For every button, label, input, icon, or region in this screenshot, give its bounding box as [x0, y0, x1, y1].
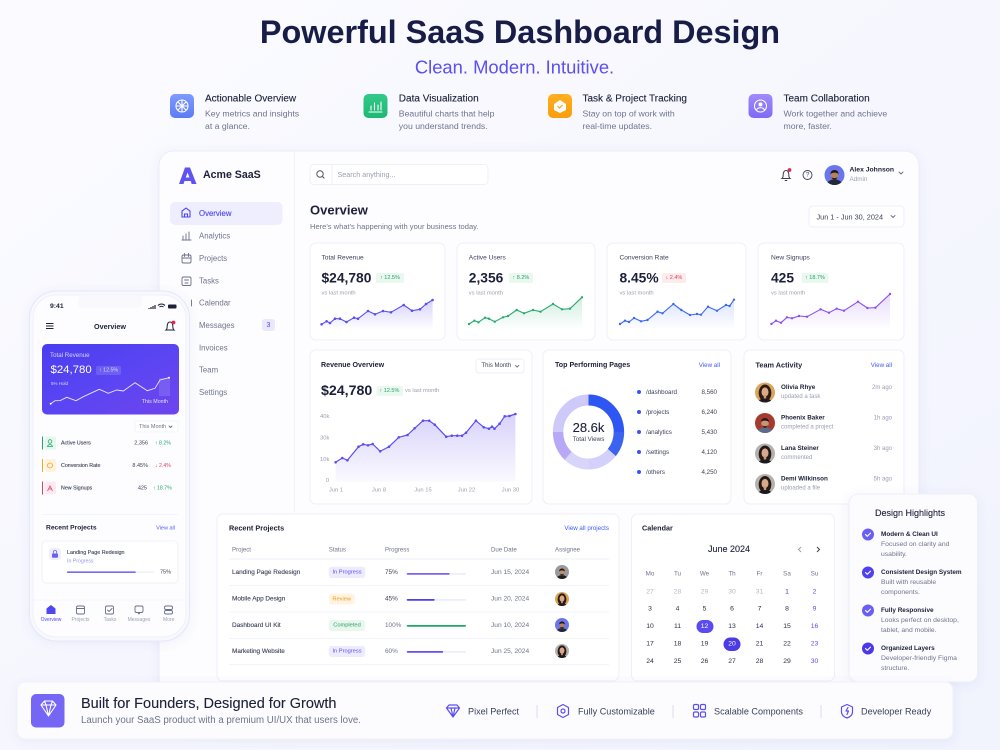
logo: Acme SaaS [203, 169, 261, 181]
panel: design highlights [849, 494, 978, 682]
date grid: 15 [783, 623, 791, 630]
highlight: fully responsive [862, 604, 959, 634]
panel: team activity: View all [871, 362, 892, 369]
badge: fully customizable: Fully Customizable [578, 706, 655, 716]
phone recent projects: In Progress [67, 558, 94, 564]
table header: Progress [385, 546, 409, 554]
date grid: 29 [701, 588, 708, 596]
donut chart [558, 400, 619, 464]
member: olivia rhye: updated a task [781, 394, 821, 400]
date grid: 8 [785, 606, 789, 612]
member: lana steiner: Lana Steiner [781, 445, 819, 452]
kpi: conversion rate: ↓ 2.4% [666, 275, 682, 281]
row: mobile app design: Jun 20, 2024 [491, 595, 529, 602]
date grid: 28 [674, 588, 681, 596]
row: landing page redesign: Landing Page Redesign [232, 569, 301, 576]
weekday labels: Mo [646, 570, 655, 578]
date grid: 25 [674, 658, 681, 665]
feature: data visualization: Data Visualization [399, 94, 479, 104]
panel: design highlights: Design Highlights [875, 508, 946, 518]
search box [310, 164, 488, 184]
date grid: 5 [703, 606, 707, 612]
kpi: conversion rate: Conversion Rate [620, 254, 669, 262]
row: dashboard ui kit: Dashboard UI Kit [232, 622, 281, 629]
nav: overview active [170, 202, 282, 225]
bottom banner [17, 682, 953, 739]
member: olivia rhye: Olivia Rhye [781, 384, 816, 391]
feature row [170, 94, 887, 131]
weekday labels: Th [728, 570, 736, 578]
phone row: new signups: ↑ 18.7% [153, 485, 172, 491]
line chart: revenue: Jun 8 [372, 488, 386, 494]
date grid: 14 [756, 623, 763, 630]
kpi: conversion rate [607, 243, 746, 340]
row: dashboard ui kit: Jun 10, 2024 [491, 622, 529, 629]
phone header [46, 321, 175, 331]
date grid: 6 [730, 606, 734, 612]
nav: team: Team [199, 366, 218, 374]
highlight: modern and clean: Focused on clarity and [881, 541, 950, 548]
nav: overview active: Overview [199, 209, 232, 218]
overview heading: Overview [310, 202, 369, 218]
highlight: modern and clean [862, 528, 950, 558]
table header: Status [329, 546, 346, 554]
phone row: conversion rate: 8.45% [132, 463, 148, 469]
kpi: conversion rate: vs last month [620, 290, 654, 296]
member: lana steiner: commented [781, 455, 812, 461]
nav item: more: More [163, 617, 175, 623]
legend: 4,250 [702, 469, 718, 476]
panel: recent projects table: View all projects [564, 525, 609, 532]
member: lana steiner: 3h ago [874, 446, 893, 452]
weekday labels: Sa [783, 570, 791, 578]
feature: task and project tracking [548, 94, 687, 131]
date grid: 17 [646, 640, 654, 648]
weekday labels [646, 570, 819, 578]
highlight: consistent design system: Built with reusable [881, 579, 936, 586]
phone dropdown [135, 421, 178, 432]
date grid: 1 [785, 588, 789, 596]
feature: task and project tracking: real-time updates. [582, 121, 652, 131]
phone project icon [49, 548, 61, 560]
badge: developer ready: Developer Ready [861, 706, 932, 716]
date grid: 29 [783, 658, 791, 665]
panel: team activity [744, 350, 904, 504]
row: marketing website: Jun 25, 2024 [491, 648, 529, 655]
line chart: revenue: Jun 15 [414, 488, 432, 494]
kpi: active users: vs last month [469, 290, 503, 296]
date grid: 21 [756, 640, 763, 648]
title: Powerful SaaS Dashboard Design [260, 14, 780, 50]
date grid: 2 [813, 588, 817, 596]
legend: /settings [646, 449, 669, 456]
kpi: new signups: vs last month [771, 290, 805, 296]
phone row: conversion rate: Conversion Rate [61, 463, 101, 469]
phone recent projects [42, 524, 178, 583]
feature: data visualization [364, 94, 495, 131]
nav item: messages: Messages [128, 617, 151, 623]
legend: /analytics [646, 429, 672, 436]
icon: help: ? [806, 172, 810, 179]
user avatar [824, 165, 844, 190]
phone revenue card: $24,780 [50, 364, 92, 376]
date grid: 10 [646, 623, 654, 630]
nav: messages [199, 319, 275, 331]
date grid: 27 [728, 658, 736, 665]
date grid: 12 [701, 623, 708, 630]
panel: calendar: Calendar [642, 524, 673, 532]
member: olivia rhye: 2m ago [872, 385, 893, 391]
row: landing page redesign: Jun 15, 2024 [491, 569, 529, 576]
search box: Search anything... [338, 170, 395, 179]
date grid: 30 [728, 588, 736, 596]
logo [179, 168, 261, 184]
phone recent projects: 75% [160, 569, 171, 575]
date grid: 26 [701, 658, 708, 665]
table header: Assignee [555, 546, 581, 554]
weekday labels: Fr [757, 570, 762, 578]
phone mockup [30, 291, 190, 641]
panel: revenue overview: $24,780 [321, 383, 372, 399]
date grid: 28 [756, 658, 763, 665]
member: phoenix baker: Phoenix Baker [781, 414, 825, 422]
table header: Due Date [491, 546, 517, 554]
nav: invoices: Invoices [199, 343, 228, 352]
weekday labels: Su [811, 570, 819, 578]
member: lana steiner [755, 444, 893, 468]
kpi: active users [457, 243, 595, 340]
feature: team collaboration: Team Collaboration [784, 94, 870, 104]
date range picker: Jun 1 - Jun 30, 2024 [816, 212, 883, 221]
month arrows [798, 547, 801, 552]
highlight: organized layers: structure. [881, 665, 909, 672]
kpi: total revenue [310, 243, 445, 340]
panel: calendar [632, 514, 834, 681]
date grid: 3 [648, 606, 652, 612]
highlight: modern and clean: usability. [881, 551, 907, 558]
panel: revenue overview: Revenue Overview [321, 361, 385, 369]
weekday labels: We [700, 570, 710, 578]
kpi: conversion rate: 8.45% [620, 270, 659, 286]
phone status bar: 9:41 [50, 303, 64, 310]
phone revenue card: Total Revenue [50, 352, 90, 359]
row: mobile app design: Review [332, 596, 352, 602]
phone revenue card: ↑ 12.5% [99, 368, 118, 374]
badge: fully customizable [558, 704, 655, 718]
line chart: revenue: 10k [320, 457, 329, 463]
phone revenue card: This Month [142, 399, 168, 405]
dropdown: this month: This Month [482, 363, 511, 369]
kpi: total revenue: Total Revenue [322, 254, 364, 262]
nav: messages: Messages [199, 321, 235, 330]
feature: data visualization: Beautiful charts that help [399, 108, 495, 118]
phone row: active users: ↑ 8.2% [155, 440, 171, 446]
phone recent projects: Recent Projects [46, 524, 97, 532]
row: marketing website: 60% [385, 648, 398, 655]
date grid: 30 [811, 658, 818, 665]
highlight: fully responsive: tablet, and mobile. [881, 627, 937, 634]
user name [850, 166, 903, 183]
nav item: overview: Overview [41, 617, 62, 623]
panel: top performing pages: Top Performing Pages [555, 361, 630, 369]
phone row: conversion rate: ↓ 2.4% [155, 463, 171, 469]
panel: top performing pages [543, 350, 731, 504]
legend: 4,120 [702, 449, 718, 456]
panel: team activity: Team Activity [756, 360, 803, 370]
kpi: total revenue: $24,780 [322, 270, 372, 286]
highlight: consistent design system [862, 566, 962, 596]
phone row: active users: 2,356 [134, 440, 148, 446]
nav item: tasks: Tasks [104, 617, 117, 623]
badge: developer ready [842, 704, 932, 718]
phone revenue card [42, 344, 179, 414]
row: mobile app design [232, 592, 569, 609]
top bar user controls [782, 165, 903, 190]
phone row: active users: Active Users [61, 440, 91, 446]
feature: task and project tracking: Task & Project Tracking [582, 94, 687, 104]
legend: /projects [646, 409, 669, 416]
phone recent projects: View all [156, 525, 175, 531]
member: phoenix baker: completed a project [781, 424, 834, 430]
date grid: 7 [758, 606, 762, 612]
date grid: 27 [646, 588, 654, 596]
highlight: modern and clean: Modern & Clean UI [881, 531, 938, 538]
banner subtext: Launch your SaaS product with a premium UI/UX that users love. [81, 715, 361, 726]
date grid: 23 [811, 640, 818, 648]
icon: notifications [782, 168, 791, 180]
line chart: revenue: Jun 1 [329, 488, 343, 494]
panel: calendar: June 2024 [708, 544, 750, 554]
nav: projects [182, 254, 227, 263]
row: mobile app design: 45% [385, 595, 398, 602]
panel: revenue overview [310, 350, 532, 504]
row: marketing website [232, 644, 569, 661]
line chart: revenue: Jun 22 [458, 488, 475, 494]
panel: revenue overview: ↑ 12.5% [380, 388, 399, 394]
line chart: revenue: 30k [320, 435, 329, 441]
date grid: 31 [756, 588, 763, 596]
date grid: 24 [646, 658, 654, 665]
member: demi wilkinson: Demi Wilkinson [781, 476, 828, 482]
member: demi wilkinson: 5h ago [874, 476, 893, 482]
date grid: 22 [783, 640, 791, 648]
legend: 5,430 [702, 429, 718, 436]
row: marketing website: In Progress [332, 649, 362, 655]
date grid: 13 [728, 623, 736, 630]
phone bottom nav [41, 605, 175, 623]
nav: messages: 3 [267, 322, 271, 329]
date grid: 16 [811, 623, 818, 630]
member: demi wilkinson: uploaded a file [781, 486, 821, 492]
nav: tasks: Tasks [199, 276, 219, 286]
nav: calendar: Calendar [199, 298, 231, 308]
kpi: new signups: ↑ 18.7% [805, 275, 825, 281]
row: dashboard ui kit: Completed [333, 622, 361, 628]
feature: actionable overview: Key metrics and insights [205, 108, 300, 118]
kpi: total revenue: ↑ 12.5% [380, 275, 400, 281]
nav: projects: Projects [199, 254, 227, 263]
legend: /dashboard [646, 389, 678, 396]
row: marketing website: Marketing Website [232, 648, 285, 655]
next month arrow [817, 547, 820, 552]
legend: /others [646, 469, 665, 476]
dashboard panel [159, 151, 919, 691]
overview heading [310, 202, 478, 231]
panel: recent projects table [217, 514, 619, 681]
feature: actionable overview: at a glance. [205, 121, 250, 131]
feature: team collaboration: Work together and achieve [784, 108, 887, 118]
line chart: revenue: 40k [320, 414, 329, 420]
phone recent projects: Landing Page Redesign [67, 550, 125, 556]
highlight: organized layers: Organized Layers [881, 645, 935, 652]
legend [637, 389, 718, 476]
phone row: new signups [42, 482, 172, 494]
panel: revenue overview: vs last month [405, 388, 439, 394]
line chart: revenue: 0 [326, 478, 329, 484]
date grid: 18 [674, 640, 681, 648]
feature: data visualization: you understand trends. [399, 121, 488, 131]
kpi: active users: ↑ 8.2% [512, 275, 529, 281]
date grid: 19 [701, 640, 708, 648]
phone row: new signups: New Signups [61, 485, 93, 491]
highlight: consistent design system: Consistent Design System [881, 569, 962, 576]
nav: analytics: Analytics [199, 232, 230, 240]
badge: pixel perfect: Pixel Perfect [468, 706, 520, 716]
panel: recent projects table: Recent Projects [229, 524, 284, 532]
feature: team collaboration: more, faster. [784, 121, 832, 131]
subtitle: Clean. Modern. Intuitive. [415, 56, 614, 78]
panel: top performing pages: View all [699, 362, 720, 369]
highlight: organized layers: Developer-friendly Figma [881, 655, 957, 662]
badge: scalable components [694, 704, 803, 717]
kpi: active users: 2,356 [469, 270, 504, 286]
phone row: new signups: 425 [138, 485, 147, 491]
phone revenue card: 5% Hold [51, 381, 69, 386]
highlight: fully responsive: Looks perfect on desktop, [881, 617, 959, 624]
feature: actionable overview [170, 94, 300, 131]
weekday labels: Tu [674, 570, 682, 578]
nav: tasks [182, 276, 219, 286]
date grid: 11 [674, 623, 681, 630]
line chart: revenue [320, 414, 519, 494]
highlight: consistent design system: components. [881, 589, 920, 596]
row: landing page redesign [232, 565, 569, 583]
member: phoenix baker: 1h ago [874, 416, 893, 422]
row: landing page redesign: 75% [385, 569, 398, 576]
row: mobile app design: Mobile App Design [232, 595, 286, 602]
badge: pixel perfect [446, 705, 520, 717]
row: dashboard ui kit [232, 618, 569, 636]
date grid: 4 [676, 606, 680, 612]
kpi: new signups [758, 243, 904, 340]
nav item: projects: Projects [71, 617, 90, 623]
banner headline: Built for Founders, Designed for Growth [81, 696, 336, 712]
highlight: fully responsive: Fully Responsive [881, 607, 934, 614]
line chart: revenue: Jun 30 [502, 488, 519, 494]
kpi: total revenue: vs last month [322, 290, 356, 296]
dropdown: this month [476, 359, 524, 373]
nav: analytics [182, 232, 230, 240]
icon: diamond badge [31, 694, 64, 728]
nav: settings: Settings [199, 388, 227, 397]
phone header: Overview [94, 322, 126, 331]
feature: task and project tracking: Stay on top of work with [582, 108, 675, 118]
phone row: conversion rate [42, 459, 171, 472]
date grid: 9 [813, 606, 817, 612]
donut chart: Total Views [573, 436, 604, 443]
highlight: organized layers [862, 642, 957, 672]
row: landing page redesign: In Progress [332, 570, 362, 576]
feature: team collaboration [748, 94, 887, 131]
sidebar [170, 168, 282, 397]
legend: 8,560 [702, 389, 718, 396]
legend: 6,240 [702, 409, 718, 416]
member: phoenix baker [755, 413, 893, 438]
user name: Admin [850, 176, 868, 183]
date grid: 20 [728, 640, 736, 648]
kpi: new signups: 425 [771, 270, 794, 286]
badge: scalable components: Scalable Components [714, 706, 803, 716]
kpi: active users: Active Users [469, 254, 507, 262]
row: dashboard ui kit: 100% [385, 622, 402, 629]
feature: actionable overview: Actionable Overview [205, 94, 297, 104]
table header: Project [232, 546, 251, 554]
table header [232, 546, 581, 554]
overview heading: Here's what's happening with your business today. [310, 222, 478, 231]
member: olivia rhye [755, 382, 893, 406]
phone row: active users [42, 436, 171, 450]
date range picker [809, 206, 904, 227]
kpi: new signups: New Signups [771, 254, 811, 262]
date grid [646, 588, 818, 665]
phone status bar [50, 295, 176, 310]
phone dropdown: This Month [139, 424, 166, 430]
donut chart: 28.6k [573, 420, 605, 435]
user name: Alex Johnson [850, 166, 894, 174]
member: demi wilkinson [755, 474, 893, 498]
